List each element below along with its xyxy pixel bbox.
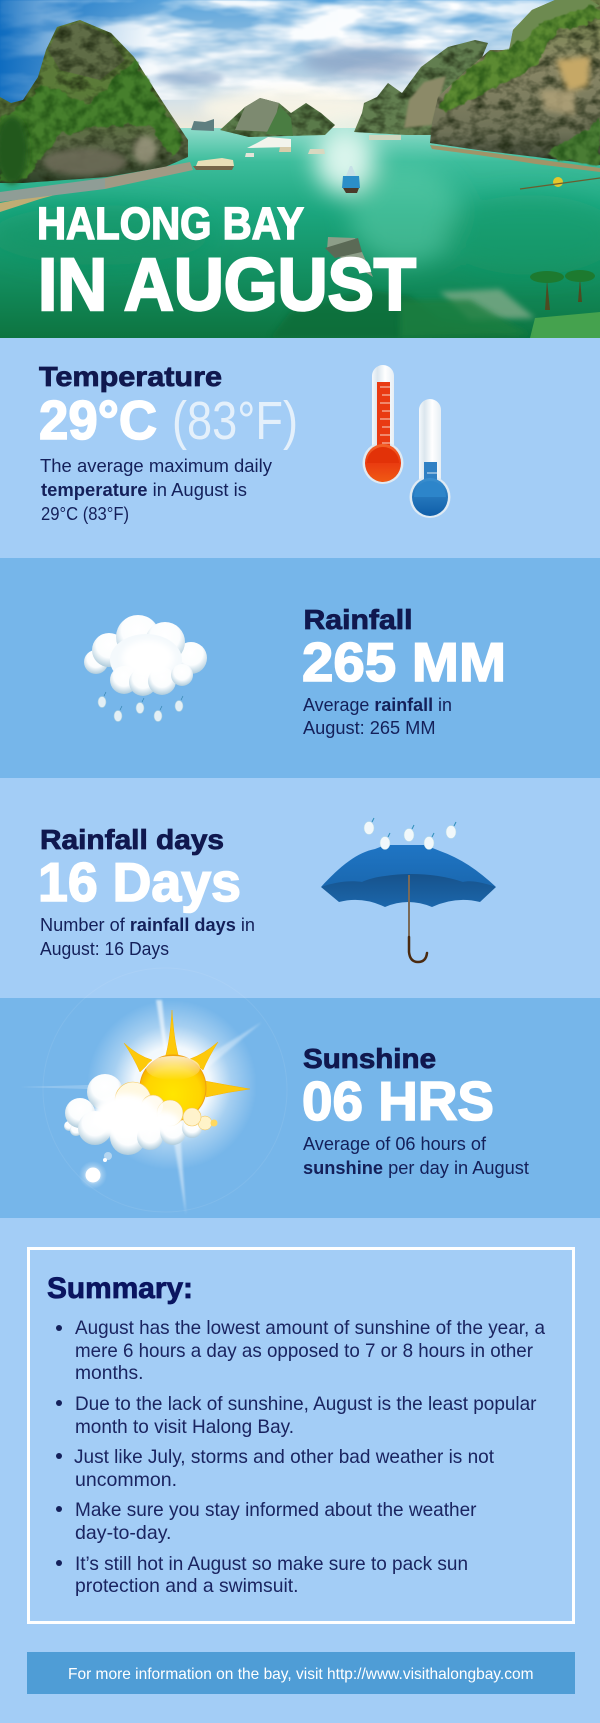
panel: sunshine bbox=[0, 968, 600, 1218]
rainfall days description bbox=[40, 914, 255, 959]
rainfall value: 265 MM bbox=[302, 631, 506, 693]
summary bullet 3 bbox=[56, 1446, 495, 1491]
icon: small bubbles bbox=[79, 1152, 112, 1189]
panel: rainfall bbox=[0, 558, 600, 778]
foreground trees bbox=[270, 270, 600, 338]
rainfall days heading: Rainfall days bbox=[40, 824, 224, 855]
temperature description: The average maximum daily bbox=[40, 455, 273, 476]
summary bullet 1 bbox=[56, 1317, 545, 1384]
left karst mountain bbox=[0, 20, 188, 184]
summary bullet 2: Due to the lack of sunshine, August is the least popular bbox=[75, 1393, 537, 1415]
boats bbox=[193, 135, 600, 277]
rainfall description bbox=[303, 694, 452, 738]
summary bullet 1: August has the lowest amount of sunshine of the year, a bbox=[75, 1317, 545, 1339]
summary bullet 4 bbox=[56, 1499, 477, 1544]
summary bullet 3: uncommon. bbox=[75, 1469, 177, 1491]
summary bullet 5: protection and a swimsuit. bbox=[75, 1575, 298, 1597]
temperature heading: Temperature bbox=[39, 361, 222, 392]
icon: raindrops bbox=[98, 692, 183, 722]
center islands bbox=[191, 98, 335, 137]
footer text: For more information on the bay, visit http://www.visithalongbay.com bbox=[68, 1666, 534, 1683]
rainfall heading: Rainfall bbox=[304, 604, 412, 635]
icon: sun and cloud bbox=[20, 968, 287, 1215]
title: IN AUGUST bbox=[38, 243, 416, 326]
sunshine value: 06 HRS bbox=[302, 1070, 494, 1132]
summary bullet 1: months. bbox=[75, 1362, 144, 1384]
icon: sun rays bbox=[124, 1010, 250, 1097]
hero photo panel bbox=[0, 0, 600, 338]
rainfall description: August: 265 MM bbox=[303, 717, 436, 738]
right main cliff bbox=[430, 0, 600, 172]
temperature description bbox=[40, 455, 273, 524]
temperature value: (83°F) bbox=[172, 391, 298, 451]
icon: rain cloud bbox=[84, 615, 207, 722]
summary bullet 4: day-to-day. bbox=[75, 1522, 172, 1544]
title bbox=[39, 206, 416, 312]
summary bullet 5 bbox=[56, 1553, 468, 1597]
summary bullet 2: month to visit Halong Bay. bbox=[75, 1416, 294, 1438]
icon: umbrella bbox=[321, 818, 496, 962]
rainfall description: Average rainfall in bbox=[303, 694, 452, 715]
icon: thermometers bbox=[362, 365, 450, 518]
icon: red thermometer bbox=[362, 365, 404, 484]
panel: temperature bbox=[0, 338, 600, 558]
temperature description: 29°C (83°F) bbox=[41, 503, 129, 524]
summary bullet 5: It’s still hot in August so make sure to pack sun bbox=[75, 1553, 468, 1575]
water sun reflection bbox=[0, 126, 600, 275]
sky bbox=[0, 0, 554, 128]
summary bullet 2 bbox=[56, 1393, 537, 1438]
summary heading: Summary: bbox=[47, 1272, 193, 1305]
icon: blue thermometer bbox=[410, 399, 450, 518]
title: HALONG BAY bbox=[37, 198, 304, 249]
sunshine description bbox=[303, 1133, 529, 1178]
pier and walkway bbox=[0, 162, 193, 212]
footer bar bbox=[27, 1652, 575, 1694]
icon: sun disc bbox=[140, 1055, 206, 1121]
sunshine description: sunshine per day in August bbox=[303, 1157, 529, 1178]
rainfall days value: 16 Days bbox=[38, 851, 241, 913]
icon: cloud bbox=[64, 1074, 218, 1155]
temperature value bbox=[39, 389, 298, 451]
rainfall days description: August: 16 Days bbox=[40, 938, 169, 959]
sunshine description: Average of 06 hours of bbox=[303, 1133, 487, 1154]
temperature description: temperature in August is bbox=[41, 479, 247, 500]
summary bullet 3: Just like July, storms and other bad weather is not bbox=[74, 1446, 495, 1468]
icon: umbrella raindrops bbox=[364, 818, 456, 850]
right middle cliff bbox=[354, 40, 488, 135]
sunshine heading: Sunshine bbox=[303, 1043, 436, 1074]
panel: rainfall days bbox=[0, 778, 600, 998]
temperature value: 29°C bbox=[39, 389, 157, 451]
rainfall days description: Number of rainfall days in bbox=[40, 914, 255, 935]
summary bullet 1: mere 6 hours a day as opposed to 7 or 8 hours in other bbox=[75, 1340, 533, 1362]
water bbox=[0, 128, 600, 338]
summary bullet 4: Make sure you stay informed about the weather bbox=[75, 1499, 477, 1521]
panel: summary bbox=[28, 1248, 574, 1622]
